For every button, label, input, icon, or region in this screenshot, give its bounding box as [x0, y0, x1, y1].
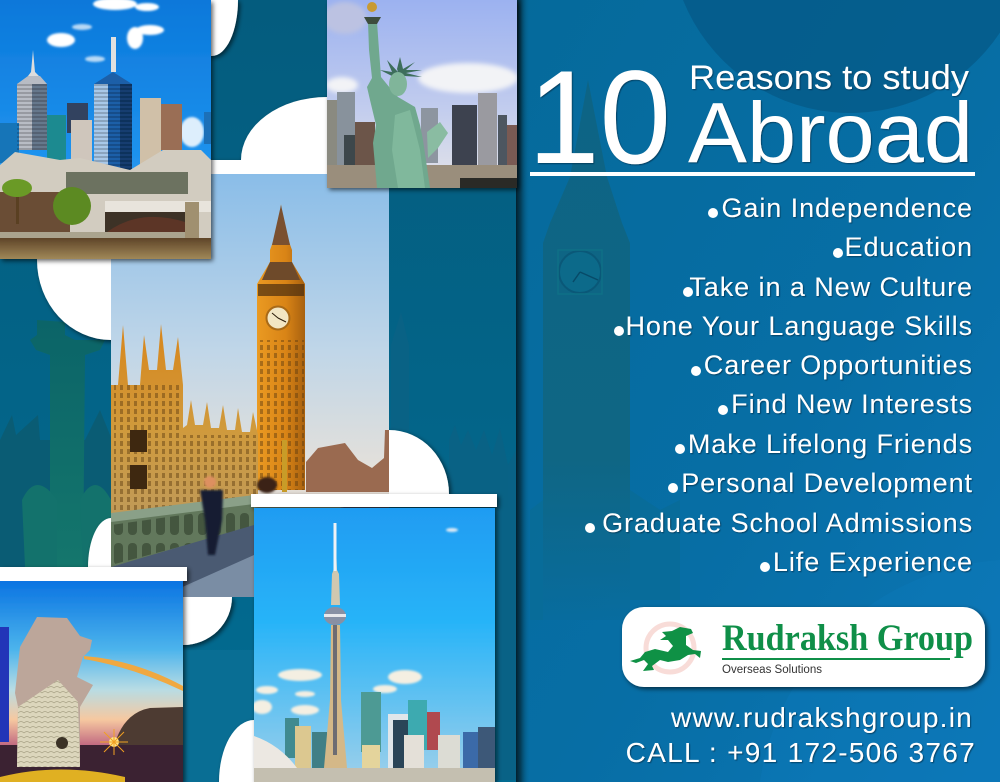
blue skyscraper — [0, 627, 9, 742]
heading: number 10: 10 — [528, 44, 671, 192]
arc: below London left — [88, 518, 115, 567]
blurred pedestrian — [200, 476, 277, 555]
sky — [0, 0, 216, 169]
Parliament building — [111, 324, 258, 515]
shoreline — [254, 768, 495, 782]
clouds — [252, 528, 458, 715]
reason 8: Personal Development — [681, 468, 973, 498]
bridge balustrade — [111, 495, 343, 567]
palm tree — [2, 179, 32, 224]
Merlion water jet — [84, 656, 183, 691]
brand rule — [722, 658, 950, 660]
reason 9: Graduate School Admissions — [602, 508, 973, 538]
stadium dome — [254, 736, 297, 768]
heading underline — [530, 172, 975, 176]
reason 6: Find New Interests — [731, 389, 973, 419]
sky — [0, 581, 188, 745]
arc: right of London — [385, 430, 449, 494]
decorative white arc shapes — [37, 0, 449, 782]
waterfront lights — [0, 745, 183, 782]
clouds — [47, 0, 204, 147]
arc: left of London — [37, 255, 115, 340]
crown rays — [380, 57, 422, 77]
Big Ben tower — [257, 204, 305, 490]
list: ten reasons — [585, 193, 973, 577]
reason 1: Gain Independence — [721, 193, 973, 223]
photo: Toronto CN Tower with white top bar — [251, 494, 497, 782]
skyline — [327, 92, 517, 188]
heading: Abroad: Abroad — [688, 86, 973, 181]
arc: behind statue — [241, 97, 330, 160]
CN Tower — [324, 523, 347, 768]
white bar — [0, 567, 187, 581]
reason 3: Take in a New Culture — [689, 272, 973, 302]
background: left teal panel — [0, 0, 518, 782]
white bar under statue gap — [208, 160, 330, 174]
green tree — [53, 187, 91, 225]
sky — [111, 174, 389, 597]
head — [389, 72, 407, 96]
reason 2: Education — [845, 232, 973, 262]
reason 10: Life Experience — [773, 547, 973, 577]
sky — [254, 508, 495, 782]
torch — [364, 17, 381, 24]
book — [427, 122, 448, 158]
arc: left of Toronto — [219, 720, 258, 782]
Merlion statue — [15, 617, 93, 767]
white bar — [251, 494, 497, 507]
reason 5: Career Opportunities — [704, 350, 973, 380]
riverbank — [0, 232, 185, 238]
ghost: parliament tower and skyline centre right — [183, 312, 516, 782]
reason 4: Hone Your Language Skills — [625, 311, 973, 341]
icon: green horse on pink ring — [630, 624, 701, 672]
brand name: Rudraksh Group — [722, 618, 973, 659]
background: right blue panel — [516, 0, 1000, 782]
Esplanade dome — [116, 707, 183, 745]
bridge — [105, 201, 211, 212]
pavement — [112, 507, 389, 587]
photo: Singapore Merlion with white top bar — [0, 567, 187, 782]
clouds — [323, 2, 518, 93]
photo: Melbourne skyline — [0, 0, 211, 259]
statue of Liberty — [364, 2, 448, 188]
ghost: lamp post and parliament left — [0, 320, 112, 567]
ghost: Big Ben silhouette — [530, 80, 680, 620]
river — [0, 238, 211, 259]
arc: top — [208, 0, 238, 56]
buildings — [0, 37, 211, 170]
tagline: Overseas Solutions — [722, 664, 822, 676]
distant buildings — [306, 430, 389, 492]
photo: Statue of Liberty with New York skyline — [323, 0, 518, 188]
sky — [327, 0, 517, 188]
low rise waterfront — [0, 150, 211, 240]
heading: Reasons to study: Reasons to study — [689, 59, 969, 97]
reason 7: Make Lifelong Friends — [688, 429, 973, 459]
website: www.rudrakshgroup.in — [670, 702, 973, 733]
logo: Rudraksh Group card — [622, 607, 985, 687]
skyline buildings — [285, 692, 495, 768]
photo: London Big Ben and Parliament — [111, 174, 389, 597]
phone: CALL : +91 172-506 3767 — [626, 737, 976, 768]
arc: below London right — [178, 597, 232, 645]
